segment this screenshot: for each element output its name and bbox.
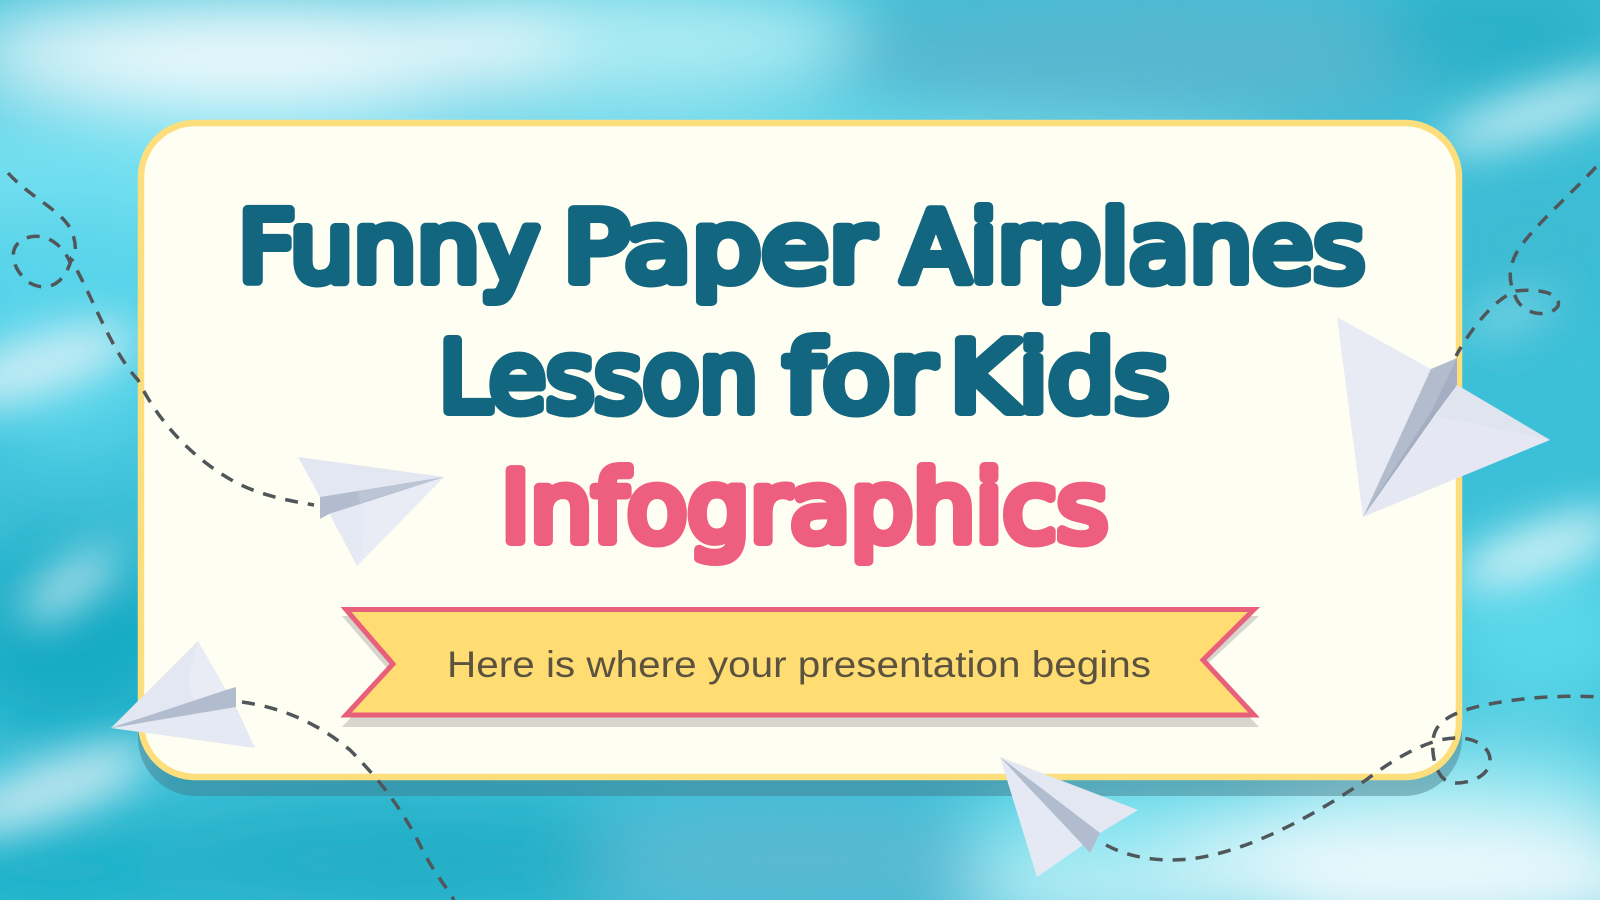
dashed trail: left loop bbox=[8, 173, 314, 505]
title: for bbox=[784, 321, 935, 434]
dashed trail: top right loop bbox=[1456, 167, 1596, 356]
title: Infographics bbox=[501, 451, 1108, 564]
dashed trail: bottom left bbox=[242, 702, 454, 900]
title: Kids bbox=[950, 321, 1169, 434]
paper airplane: left bbox=[298, 457, 444, 566]
card shadow bbox=[138, 136, 1462, 796]
title: Funny bbox=[238, 191, 539, 304]
title: Lesson bbox=[439, 321, 758, 434]
paper airplane: bottom center bbox=[1000, 757, 1138, 877]
subtitle: Here is where your presentation begins bbox=[447, 644, 1151, 685]
dashed trail: bottom right loop bbox=[1106, 696, 1600, 860]
title bbox=[238, 191, 1365, 564]
title: Airplanes bbox=[902, 191, 1365, 304]
paper airplane: right bbox=[1337, 317, 1550, 517]
title: Paper bbox=[563, 191, 874, 304]
main card bbox=[141, 123, 1459, 777]
ribbon banner bbox=[342, 610, 1259, 727]
paper airplane: bottom left bbox=[111, 641, 255, 748]
